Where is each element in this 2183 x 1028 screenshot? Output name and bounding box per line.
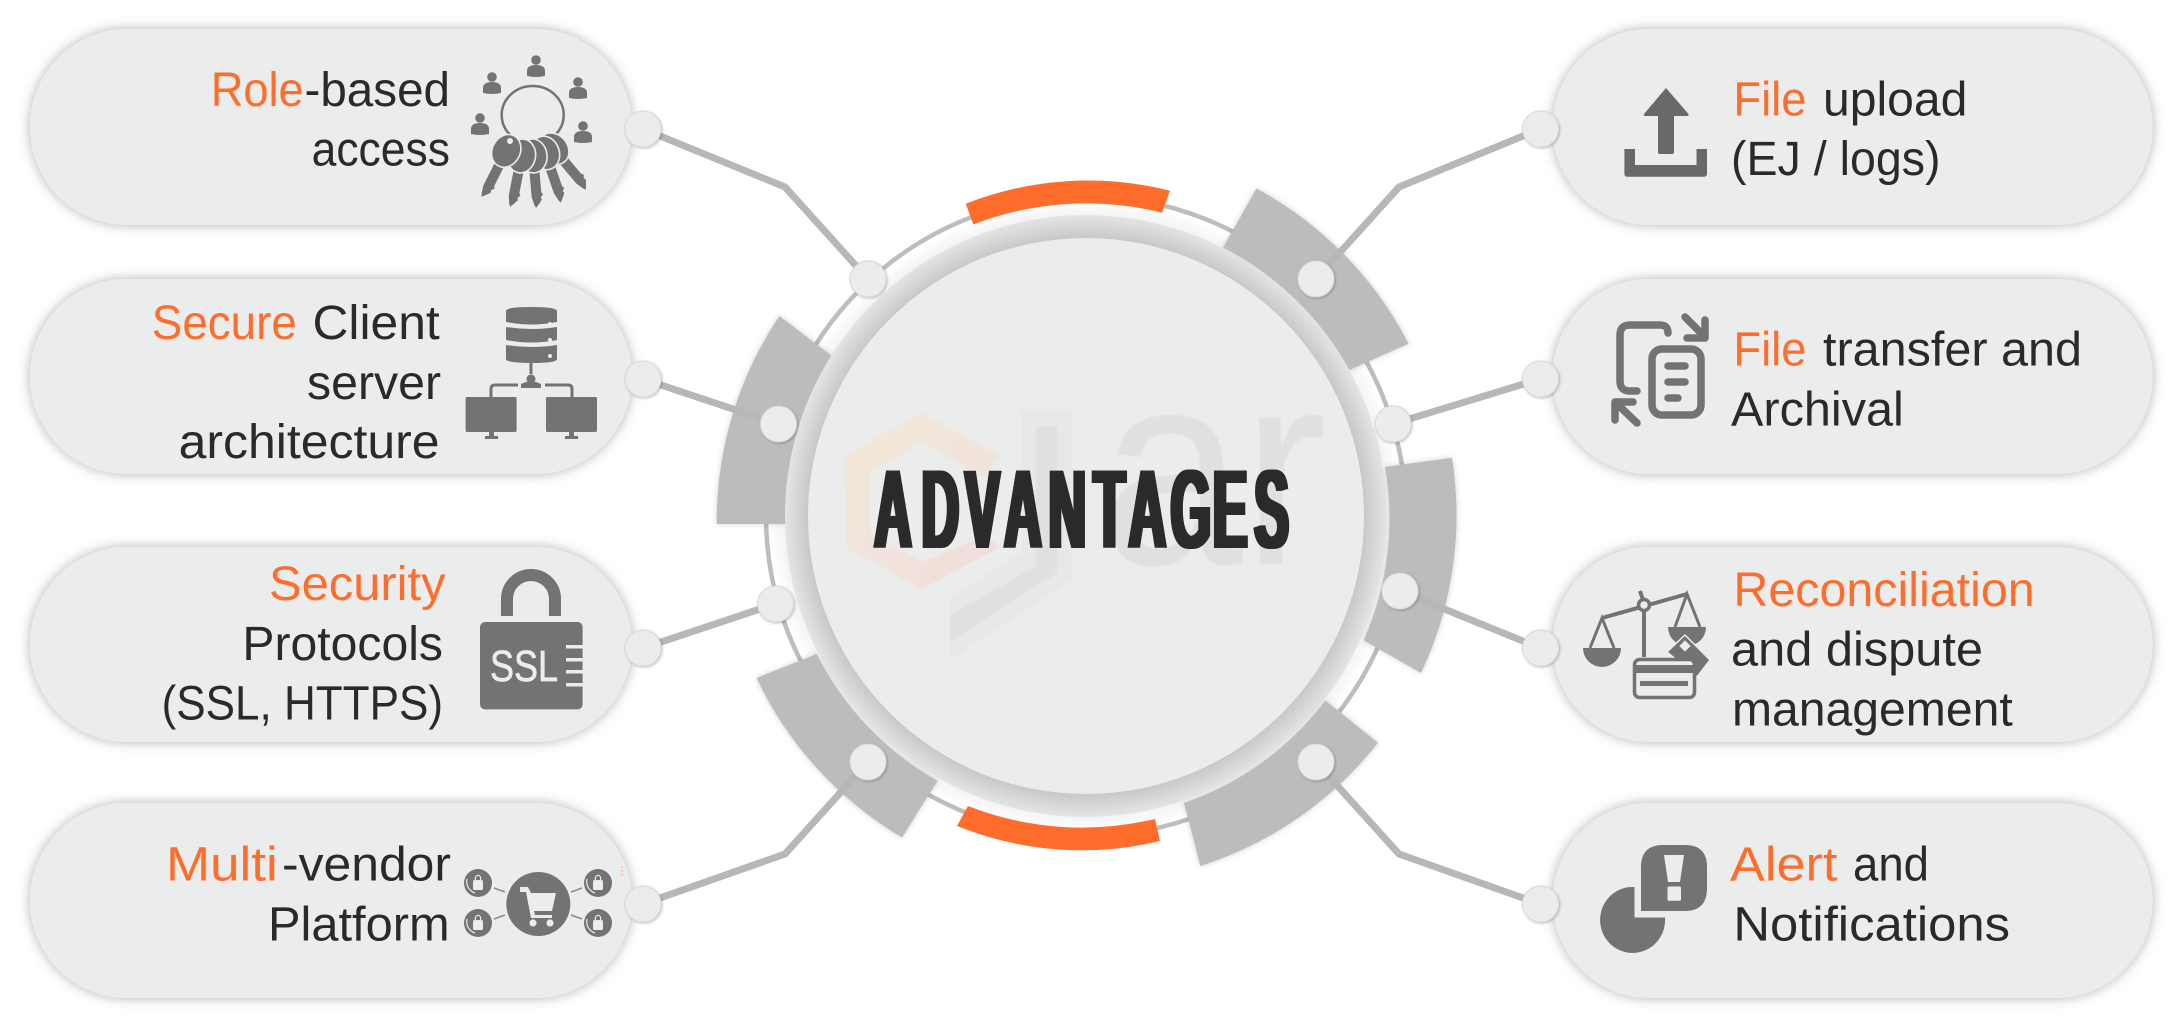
label: -vendor	[282, 838, 451, 892]
node	[1522, 111, 1558, 147]
label: Notifications	[1733, 898, 2010, 951]
inner disc	[808, 238, 1364, 794]
node	[625, 630, 661, 666]
node	[625, 361, 661, 397]
label: -based	[304, 64, 450, 117]
label: and dispute	[1731, 624, 1983, 677]
label	[1731, 74, 1967, 186]
label: upload	[1823, 74, 1967, 127]
icon: shopping cart network	[464, 866, 622, 937]
logo hexagon	[846, 413, 999, 589]
icon: upload arrow	[1624, 88, 1707, 177]
label: Archival	[1731, 384, 1904, 437]
bevel ring	[785, 215, 1387, 817]
label	[166, 838, 451, 951]
label: architecture	[179, 416, 440, 469]
label: Reconciliation	[1733, 564, 2035, 617]
node	[1522, 361, 1558, 397]
watermark logo	[846, 313, 1327, 660]
logo letters ar: ar	[1101, 313, 1327, 623]
label: management	[1732, 684, 2013, 737]
icon: SSL padlock	[480, 575, 583, 709]
panel: secure client server architecture	[30, 279, 661, 474]
panel: multi-vendor platform	[30, 803, 661, 998]
label: transfer and	[1823, 324, 2082, 377]
icon: SSL padlock: SSL	[490, 642, 558, 691]
central hub	[717, 181, 1457, 866]
label	[1731, 324, 2082, 437]
node	[625, 886, 661, 922]
ring nodes	[758, 261, 1418, 780]
node	[1522, 886, 1558, 922]
icon: file transfer	[1615, 317, 1705, 423]
orange arc: top	[966, 181, 1170, 224]
panel: security protocols	[30, 547, 661, 742]
label	[1731, 564, 2035, 737]
label: Secure	[152, 297, 297, 350]
label: Multi	[166, 838, 278, 892]
label: Protocols	[242, 618, 443, 671]
icon: alert	[1600, 845, 1707, 953]
label: (SSL, HTTPS)	[162, 678, 443, 730]
connectors	[643, 129, 1540, 904]
panel: reconciliation and dispute management	[1522, 547, 2153, 742]
panel: file transfer and archival	[1522, 279, 2153, 474]
node	[1522, 630, 1558, 666]
panel: role-based access	[30, 29, 661, 225]
label: Client	[312, 297, 440, 350]
label: and	[1853, 838, 1929, 892]
label: server	[307, 357, 441, 410]
label	[1730, 838, 2010, 951]
icon: server network	[466, 307, 597, 439]
icon: keys and users	[470, 55, 598, 210]
label: File	[1733, 324, 1806, 377]
panel: alert and notifications	[1522, 803, 2153, 998]
label	[152, 297, 441, 469]
sector: lower left	[756, 654, 938, 838]
label	[162, 558, 446, 730]
label: Security	[269, 558, 446, 611]
sector: lower right	[1184, 700, 1378, 866]
panel: file upload	[1522, 29, 2153, 225]
sector: right	[1364, 458, 1457, 673]
label	[211, 64, 450, 177]
icon: scales and cards	[1583, 591, 1710, 698]
label: File	[1733, 74, 1806, 127]
logo letter J	[950, 410, 1072, 660]
title: ADVANTAGES	[874, 448, 1289, 572]
label: Alert	[1730, 838, 1837, 892]
label: access	[312, 124, 450, 177]
label: (EJ / logs)	[1731, 133, 1940, 186]
orange arc: bottom	[957, 806, 1160, 850]
sector: upper right	[1223, 188, 1409, 370]
label: Role	[211, 64, 304, 117]
node	[625, 111, 661, 147]
label: Platform	[268, 898, 450, 951]
sector: upper left	[717, 316, 832, 524]
